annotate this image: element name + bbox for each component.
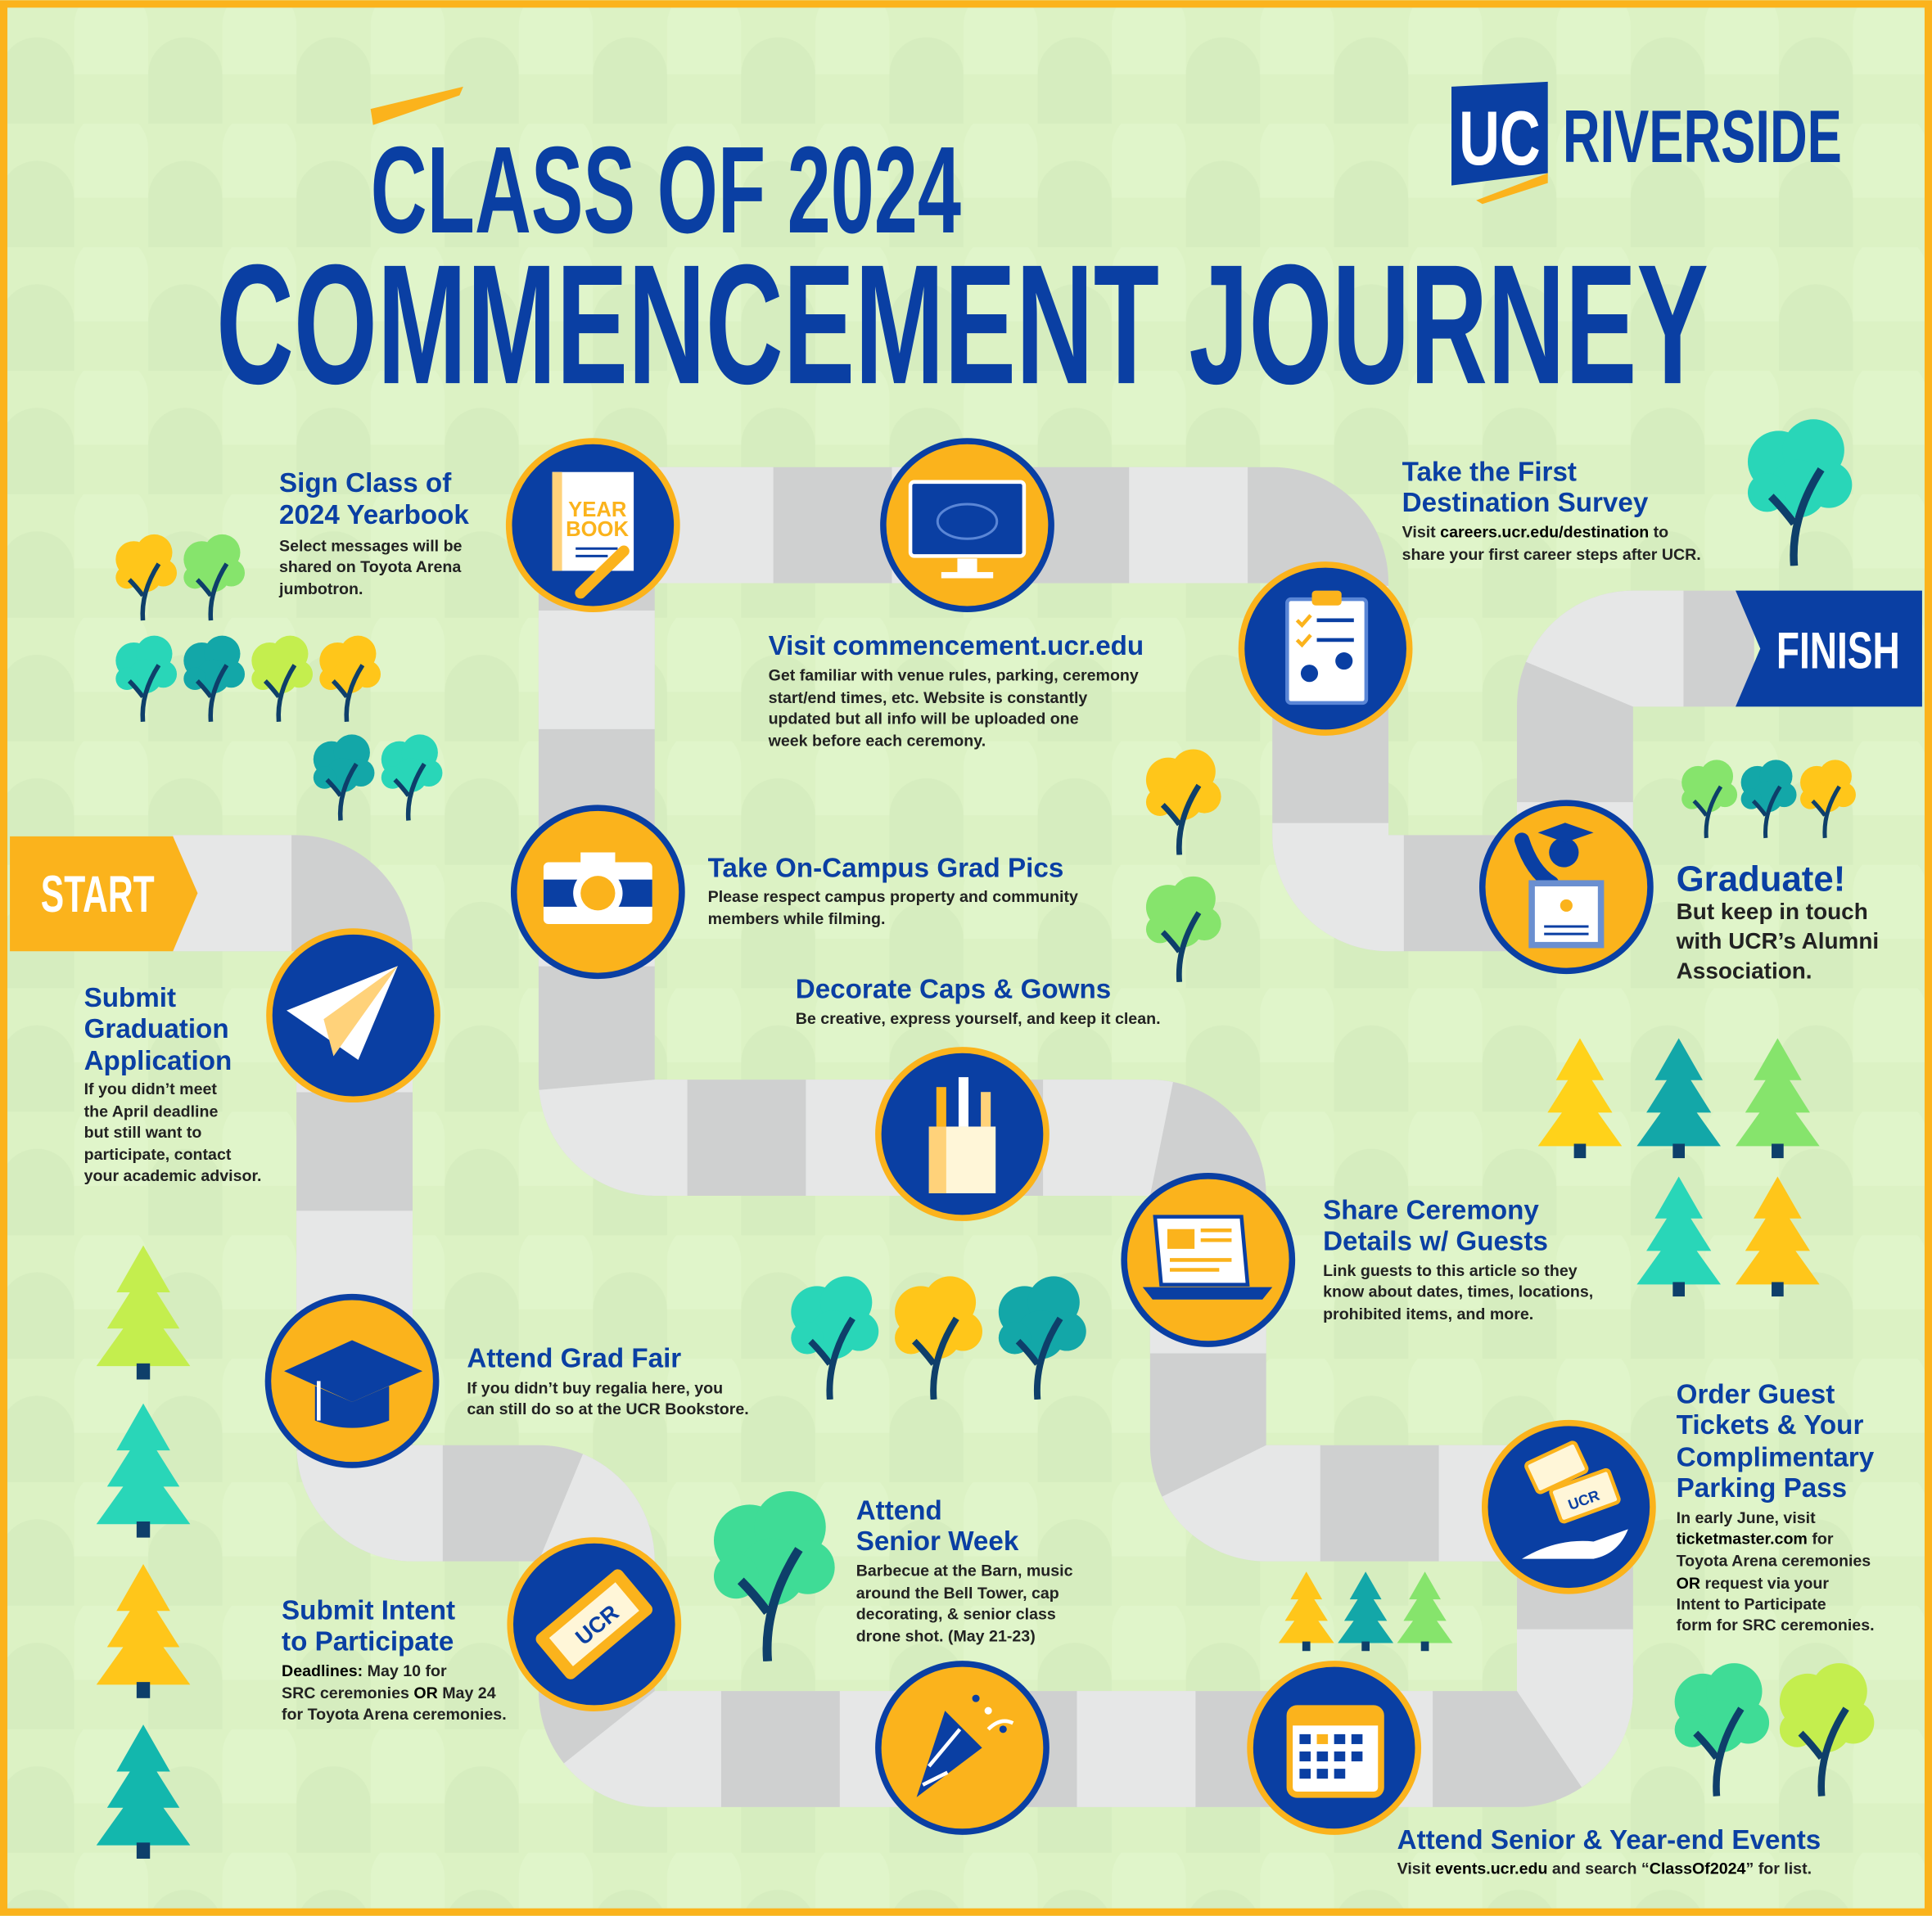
trees: deciduous groups — [115, 419, 1874, 1797]
icon: yearbook: YEAR — [568, 498, 626, 521]
text: visit website — [768, 631, 1144, 751]
logo: UC Riverside — [1451, 82, 1842, 204]
text: yearbook: 2024 Yearbook — [279, 500, 469, 530]
icon: UCR ticket — [510, 1540, 678, 1708]
text: grad fair: Attend Grad Fair — [467, 1344, 681, 1374]
text: visit website: start/end times, etc. Website is constantly — [769, 689, 1087, 707]
text: grad fair: If you didn’t buy regalia here, you — [467, 1379, 723, 1397]
text: submit application: Submit — [84, 983, 176, 1013]
title — [216, 120, 1709, 420]
gold accent slash — [371, 87, 463, 125]
text: yearbook: jumbotron. — [278, 580, 363, 598]
text: visit website: week before each ceremony. — [768, 733, 986, 751]
text: grad pics: members while filming. — [708, 910, 885, 928]
logo: UC Riverside: UC — [1459, 95, 1541, 181]
text: yearbook: Select messages will be — [279, 537, 463, 555]
start arrow — [10, 836, 197, 951]
text: order tickets: Intent to Participate — [1677, 1595, 1826, 1613]
text: senior week — [856, 1495, 1073, 1646]
text: intent to participate: to Participate — [282, 1626, 454, 1657]
icon: calendar — [1250, 1664, 1418, 1832]
text: order tickets: form for SRC ceremonies. — [1677, 1616, 1875, 1634]
icon: yearbook: BOOK — [566, 518, 630, 541]
text: senior events — [1397, 1825, 1821, 1878]
icon: paper plane — [269, 931, 437, 1099]
text: visit website: updated but all info will be uploaded one — [769, 710, 1079, 728]
text: grad pics: Please respect campus property and community — [708, 888, 1078, 906]
text: order tickets: Complimentary — [1677, 1442, 1875, 1472]
text: senior week: around the Bell Tower, cap — [856, 1585, 1059, 1603]
text: senior week: drone shot. (May 21-23) — [856, 1628, 1036, 1646]
text: share details: prohibited items, and more. — [1323, 1305, 1533, 1323]
icon: laptop — [1124, 1176, 1292, 1344]
text: order tickets: Tickets & Your — [1677, 1410, 1863, 1440]
start arrow: START — [41, 866, 155, 923]
text: graduate: Graduate! — [1677, 859, 1845, 899]
icon: tickets in hand: UCR — [1566, 1487, 1602, 1513]
text: graduate — [1676, 859, 1879, 983]
text: intent to participate: Submit Intent — [282, 1596, 455, 1626]
finish arrow — [1736, 591, 1922, 706]
text: caps and gowns: Be creative, express yourself, and keep it clean. — [796, 1010, 1161, 1028]
text: share details — [1323, 1196, 1593, 1323]
text: graduate: with UCR’s Alumni — [1676, 928, 1879, 953]
text: order tickets: OR request via your — [1677, 1575, 1829, 1593]
icon: tickets in hand — [1485, 1423, 1653, 1591]
text: visit website: Get familiar with venue rules, parking, ceremony — [769, 667, 1139, 685]
text: senior events: Visit events.ucr.edu and search “ClassOf2024” for list. — [1397, 1860, 1812, 1878]
icon: grad cap — [268, 1297, 436, 1465]
text: share details: Share Ceremony — [1323, 1196, 1539, 1226]
text: submit application: your academic advisor. — [84, 1167, 262, 1185]
icon: computer monitor — [883, 441, 1051, 609]
text: graduate: Association. — [1677, 958, 1812, 983]
text: destination survey: Take the First — [1402, 457, 1577, 487]
text: order tickets: Order Guest — [1677, 1379, 1835, 1409]
text: caps and gowns — [796, 975, 1161, 1028]
text: submit application: Graduation — [84, 1014, 229, 1044]
road path — [173, 525, 1754, 1749]
trees: pines — [97, 1038, 1820, 1859]
text: destination survey: Visit careers.ucr.edu/destination to — [1402, 524, 1668, 542]
text: intent to participate: SRC ceremonies OR May 24 — [282, 1684, 496, 1702]
text: share details: Link guests to this article so they — [1323, 1262, 1578, 1280]
text: order tickets — [1677, 1379, 1875, 1634]
text: order tickets: Parking Pass — [1677, 1473, 1847, 1503]
text: senior week: Attend — [856, 1495, 942, 1526]
text: submit application — [84, 983, 262, 1185]
text: senior week: Barbecue at the Barn, music — [856, 1562, 1073, 1580]
text: share details: know about dates, times, locations, — [1323, 1283, 1593, 1301]
text: senior week: decorating, & senior class — [856, 1606, 1056, 1624]
text: order tickets: Toyota Arena ceremonies — [1677, 1553, 1871, 1571]
text: caps and gowns: Decorate Caps & Gowns — [796, 975, 1111, 1005]
text: visit website: Visit commencement.ucr.edu — [769, 631, 1144, 661]
text: grad fair: can still do so at the UCR Bookstore. — [467, 1400, 749, 1418]
text: destination survey: share your first career steps after UCR. — [1402, 546, 1701, 564]
text: grad pics — [708, 854, 1078, 928]
text: intent to participate — [282, 1596, 507, 1724]
text: intent to participate: Deadlines: May 10 for — [282, 1662, 447, 1680]
icon: yearbook — [509, 441, 677, 609]
text: order tickets: In early June, visit — [1677, 1509, 1816, 1527]
icon: UCR ticket: UCR — [571, 1599, 624, 1650]
text: submit application: Application — [84, 1046, 232, 1076]
text: submit application: If you didn’t meet — [84, 1080, 217, 1098]
text: grad pics: Take On-Campus Grad Pics — [708, 854, 1063, 884]
icon: party popper — [878, 1664, 1046, 1832]
text: yearbook: shared on Toyota Arena — [279, 558, 462, 576]
text: submit application: the April deadline — [84, 1102, 219, 1120]
text: share details: Details w/ Guests — [1323, 1226, 1548, 1256]
text: destination survey: Destination Survey — [1402, 488, 1649, 518]
title: CLASS OF 2024 — [371, 120, 961, 259]
text: yearbook: Sign Class of — [279, 468, 452, 498]
text: order tickets: ticketmaster.com for — [1677, 1530, 1834, 1548]
text: destination survey — [1402, 457, 1701, 564]
text: grad fair — [467, 1344, 749, 1418]
text: senior week: Senior Week — [856, 1526, 1019, 1557]
text: submit application: but still want to — [84, 1124, 201, 1142]
text: graduate: But keep in touch — [1677, 899, 1868, 924]
text: yearbook — [278, 468, 469, 598]
icon: graduate diploma — [1483, 803, 1650, 971]
icon: pencils cup — [878, 1050, 1046, 1218]
icon: camera — [514, 808, 682, 976]
icon: clipboard — [1241, 565, 1410, 733]
text: submit application: participate, contact — [84, 1146, 232, 1164]
text: intent to participate: for Toyota Arena ceremonies. — [282, 1706, 507, 1724]
text: senior events: Attend Senior & Year-end Events — [1397, 1825, 1821, 1855]
